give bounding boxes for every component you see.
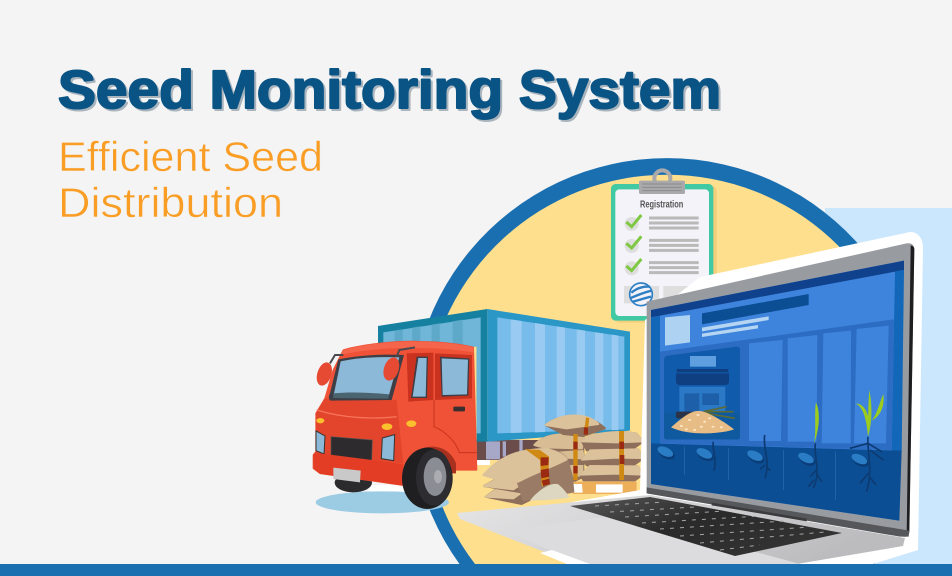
lamps and grille bbox=[316, 418, 324, 423]
mirrors bbox=[330, 347, 415, 363]
spilled seeds bbox=[530, 484, 569, 501]
subtitle bbox=[58, 133, 323, 226]
dashboard panel bbox=[660, 319, 894, 450]
form heading: Registration bbox=[640, 199, 683, 210]
dashboard header bars bbox=[702, 294, 809, 337]
laptop base bbox=[457, 495, 905, 564]
stamp bbox=[630, 283, 652, 306]
subtitle: Distribution bbox=[58, 179, 283, 226]
delivery truck bbox=[313, 309, 630, 513]
clipboard: registration form bbox=[611, 170, 717, 323]
bumper and plate bbox=[313, 453, 403, 485]
light blue backdrop panel bbox=[825, 208, 952, 564]
title: Seed Monitoring System bbox=[60, 62, 723, 122]
cargo container bbox=[378, 309, 630, 460]
right sack stack bbox=[534, 415, 644, 481]
title: Seed Monitoring System bbox=[58, 60, 721, 120]
windshield bbox=[329, 355, 404, 401]
bottom bar bbox=[0, 564, 952, 576]
soil band with seed growth stages bbox=[651, 390, 902, 521]
side windows bbox=[411, 357, 428, 398]
subtitle: Efficient Seed bbox=[58, 133, 323, 180]
front wheel bbox=[410, 447, 456, 473]
pallet bbox=[570, 482, 637, 494]
rear wheel far side bbox=[335, 473, 372, 492]
screen bbox=[651, 261, 904, 521]
cab body bbox=[313, 341, 477, 485]
keyboard bbox=[570, 497, 842, 556]
seed sacks bbox=[483, 415, 644, 504]
checklist bbox=[625, 215, 699, 275]
dashboard logo tile bbox=[665, 315, 690, 346]
white cut-out outline bbox=[470, 232, 923, 564]
left sack stack bbox=[483, 449, 573, 504]
yellow circle with blue ring bbox=[411, 158, 915, 564]
storefront and seed pile card bbox=[664, 347, 740, 439]
laptop lid and screen bbox=[647, 243, 914, 537]
laptop bbox=[457, 232, 923, 564]
ground shadow bbox=[367, 459, 490, 497]
